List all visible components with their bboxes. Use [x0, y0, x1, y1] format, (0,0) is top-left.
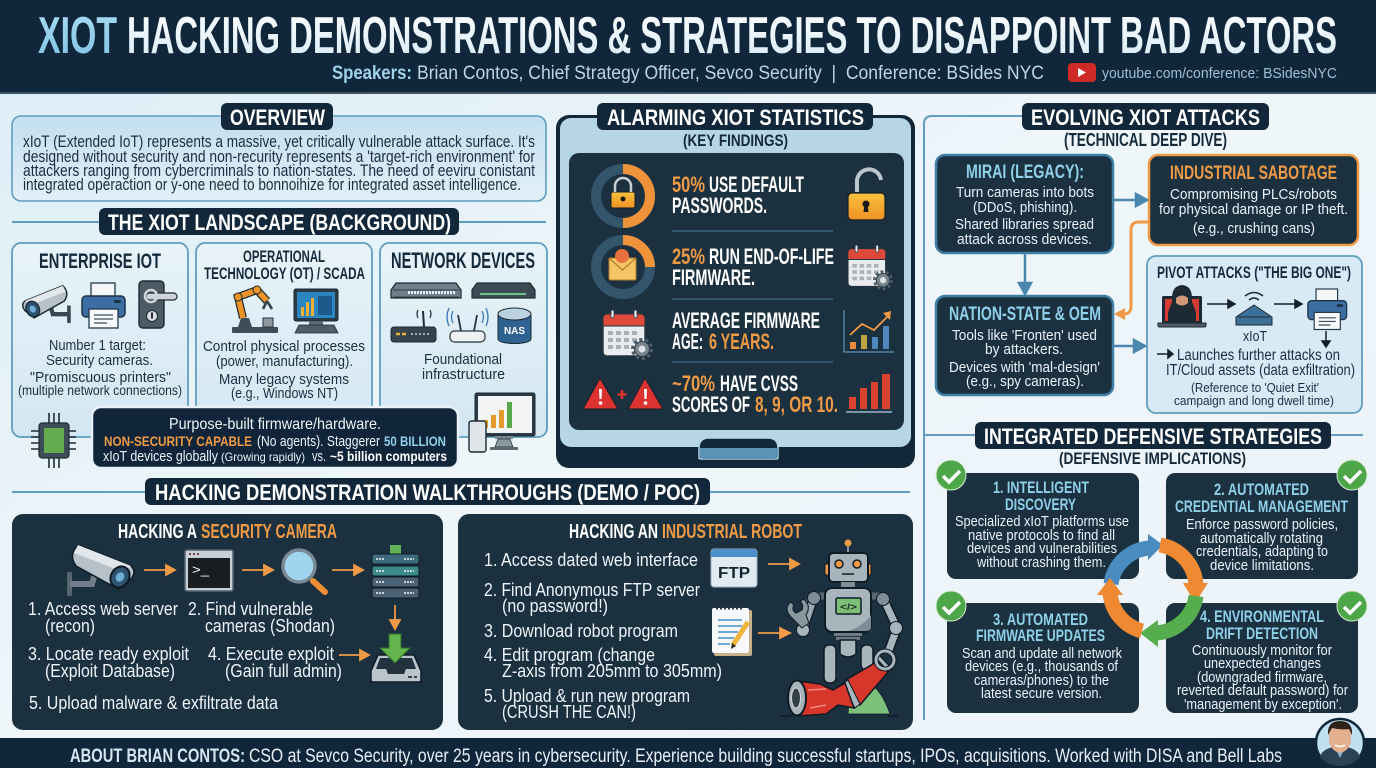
stat: 25% end of life firmware: RUN END-OF-LIFE [709, 244, 834, 269]
arrow: nation-state to pivot [1113, 340, 1145, 352]
footer band [0, 738, 1376, 768]
box: automated credential management: credentials, adapting to [1196, 544, 1328, 560]
box: nation-state and oem: by attackers. [985, 342, 1063, 358]
robot steps: 1. Access dated web interface [484, 549, 698, 570]
robot steps: 5. Upload & run new program [484, 685, 690, 706]
icon: notepad [712, 608, 752, 656]
icon: youtube [1068, 63, 1096, 82]
arrow [332, 565, 363, 575]
box: environmental drift detection [1166, 603, 1358, 713]
icon: terminal: >_ [192, 562, 210, 577]
speakers line: Speakers: [332, 63, 412, 84]
enterprise heading: ENTERPRISE IOT [39, 249, 161, 273]
robot steps: 4. Edit program (change [484, 644, 655, 665]
box: automated credential management: automatically rotating [1200, 531, 1323, 547]
stat: average firmware age: AVERAGE FIRMWARE [672, 308, 820, 333]
network heading: NETWORK DEVICES [391, 248, 535, 273]
arrow [242, 565, 273, 575]
box: intelligent discovery [947, 473, 1139, 579]
callout: purpose-built firmware: ~5 billion computers [330, 448, 447, 464]
arrow: down [1322, 331, 1330, 347]
camera steps: 3. Locate ready exploit [28, 643, 189, 664]
camera steps: 2. Find vulnerable [188, 598, 313, 619]
header band [0, 0, 1376, 94]
box: nation-state and oem: (e.g., spy cameras). [966, 374, 1084, 390]
icon: nas: NAS [504, 326, 525, 337]
icon: magnifier [283, 550, 325, 592]
robot panel heading: HACKING AN [569, 521, 658, 543]
box: intelligent discovery: native protocols to find all [968, 528, 1115, 544]
stat: average firmware age [603, 308, 894, 358]
enterprise text: Security cameras. [46, 353, 153, 369]
box: intelligent discovery: devices and vulnerabilities [967, 541, 1117, 557]
ot text [203, 339, 365, 402]
icon: calendar with gear [848, 245, 891, 288]
pivot text [1166, 347, 1355, 408]
stat: 70% cvss scores: ~70% [672, 371, 715, 396]
ot heading: TECHNOLOGY (OT) / SCADA [204, 264, 365, 283]
camera steps: cameras (Shodan) [205, 615, 335, 636]
icon: xiot router [1236, 292, 1272, 325]
enterprise text [18, 338, 182, 398]
callout: purpose-built firmware: NON-SECURITY CAPABLE [104, 433, 252, 449]
arrow [339, 650, 369, 660]
network text [422, 352, 505, 383]
box: automated credential management: device limitations. [1210, 558, 1314, 574]
icon: warning triangles [583, 378, 663, 409]
stat: 70% cvss scores: 8, 9, OR 10. [755, 392, 838, 417]
speakers line: Brian Contos, Chief Strategy Officer, Sevco Security | Conference: BSides NYC [417, 63, 1044, 84]
camera steps: (Exploit Database) [45, 660, 175, 681]
box: nation-state and oem: NATION-STATE & OEM [949, 303, 1101, 325]
stat: average firmware age: AGE: [672, 329, 703, 354]
overview text [23, 133, 535, 194]
tablet home button [699, 438, 778, 459]
stat: 50% default passwords: PASSWORDS. [672, 193, 767, 218]
heading: evolving attacks: EVOLVING XIOT ATTACKS [1031, 105, 1260, 130]
ot text: Control physical processes [203, 339, 365, 355]
overview text: designed without security and non-recurity represents a 'target-rich environment' for [23, 148, 535, 166]
box: environmental drift detection: DRIFT DETECTION [1206, 624, 1318, 643]
heading: alarming statistics: ALARMING XIOT STATISTICS [607, 105, 864, 130]
footer band: ABOUT BRIAN CONTOS: [70, 746, 245, 767]
enterprise text: Number 1 target: [49, 338, 146, 354]
camera steps: (recon) [45, 615, 95, 636]
pivot text: campaign and long dwell time) [1174, 393, 1334, 408]
arrow: launches [1157, 350, 1173, 358]
box: nation-state and oem: Devices with 'mal-design' [949, 360, 1100, 376]
overview text: integrated operaction or y-one need to bonnoihize for integrated asset intelligence. [23, 176, 521, 194]
robot steps: (CRUSH THE CAN!) [502, 701, 636, 722]
overview text: xIoT (Extended IoT) represents a massive, yet critically vulnerable attack surface. It's [23, 133, 535, 151]
box: mirai legacy: attack across devices. [957, 232, 1092, 248]
box: mirai legacy: MIRAI (LEGACY): [966, 161, 1084, 183]
robot steps: Z-axis from 205mm to 305mm) [502, 660, 722, 681]
icon: open padlock [848, 169, 885, 220]
stat: 70% cvss scores: SCORES OF [672, 392, 750, 417]
stat: 70% cvss scores: HAVE CVSS [720, 371, 798, 396]
icon: security camera [23, 286, 71, 323]
camera panel heading: SECURITY CAMERA [201, 521, 337, 543]
icon: scada monitor [294, 289, 338, 333]
pivot text: (Reference to 'Quiet Exit' [1191, 380, 1319, 395]
heading: hacking demonstration walkthroughs: HACKING DEMONSTRATION WALKTHROUGHS (DEMO / POC) [155, 480, 700, 505]
box: automated firmware updates: 3. AUTOMATED [993, 610, 1088, 629]
ot text: (e.g., Windows NT) [231, 386, 338, 402]
heading: overview: OVERVIEW [230, 105, 325, 130]
camera steps: (Gain full admin) [225, 660, 342, 681]
camera steps: 5. Upload malware & exfiltrate data [29, 692, 279, 713]
icon: trend chart [844, 310, 894, 352]
callout: purpose-built firmware: (No agents). Staggerer [257, 434, 380, 450]
stat: 25% end of life firmware: FIRMWARE. [672, 265, 755, 290]
stat: 25% end of life firmware: 25% [672, 244, 705, 269]
icon: wifi router [447, 308, 488, 342]
icon: check 4 [1337, 591, 1367, 621]
camera steps [28, 598, 342, 713]
callout: purpose-built firmware: 50 BILLION [384, 433, 446, 449]
icon: robot crushing can [780, 540, 902, 716]
panel: network devices [380, 243, 547, 437]
arrow [1207, 300, 1235, 308]
overview text: attackers ranging from cybercriminals to nation-states. The need of eeviru conistant [23, 162, 535, 180]
box: environmental drift detection: (downgraded firmware, [1197, 670, 1327, 686]
icon: router [391, 310, 436, 342]
box: automated firmware updates: devices (e.g., thousands of [965, 659, 1119, 675]
arrow: mirai to industrial [1113, 194, 1147, 206]
icon: ftp window [711, 549, 757, 587]
robot panel heading: INDUSTRIAL ROBOT [662, 521, 802, 543]
panel: overview [12, 103, 546, 201]
ot text: Many legacy systems [219, 372, 349, 388]
box: environmental drift detection: 'management by exception'. [1184, 697, 1342, 713]
box: nation-state and oem: Tools like 'Fronten' used [952, 328, 1097, 344]
icon: security camera large [67, 545, 134, 596]
icon: hacker laptop [1158, 285, 1206, 327]
icon: chip [31, 413, 76, 468]
icon: calendar with gear [603, 310, 651, 358]
icon: robot arm [232, 286, 278, 333]
title: XIOT [38, 7, 117, 65]
box: nation-state and oem [936, 296, 1113, 395]
icon: server stack [372, 545, 419, 598]
icon: download tray [371, 634, 421, 682]
box: environmental drift detection: unexpected changes [1204, 656, 1321, 672]
box: mirai legacy: (DDoS, phishing). [973, 200, 1077, 216]
box: environmental drift detection: Continuously monitor for [1192, 643, 1332, 659]
enterprise text: "Promiscuous printers" [30, 370, 171, 386]
ot text: (power, manufacturing). [216, 354, 353, 370]
box: intelligent discovery: 1. INTELLIGENT [993, 478, 1089, 497]
icon: ftp window: FTP [718, 565, 750, 582]
box: automated credential management: Enforce password policies, [1186, 517, 1338, 533]
box: industrial sabotage: for physical damage or IP theft. [1159, 202, 1348, 218]
icon: red bars [846, 374, 892, 412]
portrait: brian contos [1316, 719, 1364, 767]
arrow: mirai to nation-state [1019, 253, 1031, 294]
robot steps [484, 549, 722, 722]
pivot text: Launches further attacks on [1177, 347, 1340, 364]
icon: printer [82, 283, 125, 328]
panel: hacking a security camera [12, 514, 443, 730]
icon: check 1 [936, 460, 966, 490]
network text: Foundational [424, 352, 502, 368]
box: mirai legacy [936, 155, 1113, 253]
camera steps: 4. Execute exploit [208, 643, 334, 664]
stat: 70% cvss scores [583, 371, 892, 417]
camera steps: 1. Access web server [28, 598, 178, 619]
icon: nas [498, 308, 531, 344]
network text: infrastructure [422, 367, 505, 383]
box: automated firmware updates: Scan and update all network [962, 646, 1123, 662]
subheading: technical deep dive: (TECHNICAL DEEP DIVE) [1064, 130, 1227, 150]
icon: check 3 [936, 591, 966, 621]
callout: purpose-built firmware: xIoT devices globally [103, 449, 218, 465]
panel: operational technology [196, 243, 372, 437]
subheading: defensive implications: (DEFENSIVE IMPLICATIONS) [1059, 449, 1246, 468]
icon: check 2 [1337, 460, 1367, 490]
arrow [768, 559, 799, 569]
box: industrial sabotage: (e.g., crushing cans) [1193, 221, 1315, 237]
robot panel heading [569, 521, 802, 543]
callout: purpose-built firmware: Purpose-built firmware/hardware. [169, 416, 381, 433]
box: automated firmware updates [947, 603, 1139, 713]
stat: 50% default passwords [596, 169, 885, 223]
stat: 50% default passwords: USE DEFAULT [709, 172, 804, 197]
box: intelligent discovery: without crashing them. [976, 555, 1106, 571]
box: environmental drift detection: 4. ENVIRONMENTAL [1200, 607, 1324, 626]
icon: monitor and tablet [469, 393, 535, 452]
panel: alarming statistics tablet [556, 103, 915, 468]
icon: cycle arrows [1097, 534, 1208, 647]
ot heading: OPERATIONAL [243, 247, 325, 266]
callout: purpose-built firmware: vs. [312, 449, 326, 465]
robot steps: (no password!) [502, 595, 608, 616]
panel outline: right column [924, 116, 1022, 720]
box: industrial sabotage: Compromising PLCs/robots [1170, 187, 1337, 203]
stat: 25% end of life firmware [596, 240, 891, 294]
donut 50 percent [596, 169, 650, 223]
donut 25 percent [596, 240, 650, 294]
icon: network switch [391, 283, 461, 298]
stat: 50% default passwords: 50% [672, 172, 705, 197]
panel: hacking an industrial robot [458, 514, 913, 730]
box: automated credential management: 2. AUTOMATED [1214, 480, 1309, 499]
box: mirai legacy: Turn cameras into bots [956, 185, 1094, 201]
box: pivot attacks [1147, 256, 1362, 413]
arrow [390, 605, 400, 629]
box: automated firmware updates: cameras/phones) to the [974, 673, 1109, 689]
box: automated credential management [1166, 473, 1358, 579]
arrow: industrial to nation-state [1114, 222, 1149, 320]
stat: average firmware age: 6 YEARS. [709, 329, 774, 354]
arrow [758, 628, 790, 638]
heading: xiot landscape: THE XIOT LANDSCAPE (BACKGROUND) [108, 210, 451, 235]
icon: rack box [472, 283, 535, 298]
callout: purpose-built firmware [92, 407, 458, 468]
arrow [1274, 300, 1302, 308]
icon: robot crushing can: </> [840, 602, 857, 612]
youtube link: youtube.com/conference: BSidesNYC [1102, 65, 1337, 82]
box: industrial sabotage [1149, 155, 1358, 245]
camera panel heading: HACKING A [118, 521, 197, 543]
callout: purpose-built firmware: (Growing rapidly) [221, 450, 305, 464]
box: automated firmware updates: FIRMWARE UPDATES [976, 626, 1105, 645]
box: environmental drift detection: reverted default password) for [1177, 683, 1348, 699]
box: intelligent discovery: Specialized xIoT platforms use [955, 514, 1129, 530]
subheading: key findings: (KEY FINDINGS) [683, 131, 788, 150]
icon: door lock [139, 281, 177, 328]
box: mirai legacy: Shared libraries spread [955, 217, 1094, 233]
ot heading [204, 247, 365, 283]
box: automated firmware updates: latest secure version. [981, 686, 1102, 702]
arrow [144, 565, 175, 575]
robot steps: 2. Find Anonymous FTP server [484, 579, 700, 600]
box: intelligent discovery: DISCOVERY [1005, 495, 1076, 514]
panel: enterprise iot [12, 243, 188, 437]
robot steps: 3. Download robot program [484, 620, 678, 641]
label: xiot: xIoT [1243, 329, 1267, 345]
camera panel heading [118, 521, 337, 543]
icon: printer [1308, 289, 1347, 330]
enterprise text: (multiple network connections) [18, 383, 182, 398]
heading: hacking demonstration walkthroughs [12, 478, 910, 505]
icon: terminal [185, 550, 233, 591]
